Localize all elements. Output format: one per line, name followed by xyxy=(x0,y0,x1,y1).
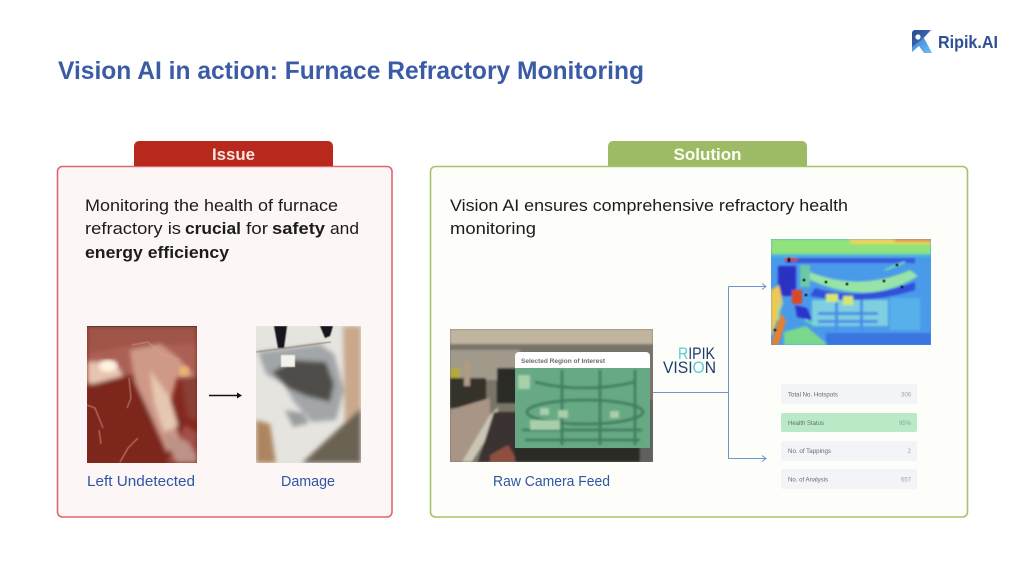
card: total hotspots: 306 xyxy=(901,392,912,398)
solution tab: Solution xyxy=(674,146,742,164)
label: raw camera feed: Raw Camera Feed xyxy=(493,474,610,490)
issue description: crucial xyxy=(185,219,241,238)
card: total hotspots xyxy=(781,384,917,404)
label: damage: Damage xyxy=(281,474,335,490)
issue tab xyxy=(134,141,333,166)
logo: Ripik Vision: RIPIK xyxy=(678,345,715,363)
issue description: Monitoring the health of furnace xyxy=(85,196,338,215)
logo: Ripik.AI xyxy=(912,30,998,53)
region of interest label: Selected Region of Interest xyxy=(521,358,606,365)
photo: damaged refractory xyxy=(256,326,361,463)
metrics cards xyxy=(781,384,917,489)
title: Vision AI in action: Furnace Refractory Monitoring xyxy=(58,57,644,85)
issue tab: Issue xyxy=(212,146,255,164)
label: left undetected: Left Undetected xyxy=(87,474,195,490)
logo: Ripik Vision xyxy=(663,345,716,377)
heatmap image xyxy=(771,239,931,345)
card: health status: Health Status xyxy=(788,421,824,427)
issue panel background xyxy=(58,166,392,517)
card: total hotspots: Total No. Hotspots xyxy=(788,392,838,398)
card: tappings: 2 xyxy=(908,449,912,455)
solution description: monitoring xyxy=(450,219,536,238)
solution panel background xyxy=(430,166,968,517)
solution description: Vision AI ensures comprehensive refractory health xyxy=(450,196,848,215)
photo: cracked refractory xyxy=(87,326,197,463)
card: tappings xyxy=(781,441,917,461)
issue description: and xyxy=(330,219,359,238)
card: health status xyxy=(781,413,917,432)
card: analysis: No. of Analysis xyxy=(788,478,828,484)
card: tappings: No. of Tappings xyxy=(788,449,831,455)
issue description: safety xyxy=(272,219,326,238)
photo: raw camera feed with region of interest xyxy=(450,329,653,462)
panel: issue xyxy=(58,141,392,517)
solution tab xyxy=(608,141,807,166)
card: health status: 95% xyxy=(899,421,912,427)
logo: Ripik.AI: Ripik.AI xyxy=(938,32,998,52)
card: analysis: 657 xyxy=(901,478,912,484)
issue description xyxy=(85,196,359,262)
logo: Ripik Vision: VISION xyxy=(663,359,716,377)
region of interest overlay xyxy=(515,368,650,448)
solution description xyxy=(450,196,848,238)
issue description: for xyxy=(246,219,268,238)
arrow xyxy=(209,392,242,398)
issue description: refractory is xyxy=(85,219,181,238)
region of interest label xyxy=(515,352,650,368)
panel: solution xyxy=(430,141,968,517)
card: analysis xyxy=(781,469,917,489)
issue description: energy efficiency xyxy=(85,243,230,262)
connector arrows xyxy=(653,284,766,462)
